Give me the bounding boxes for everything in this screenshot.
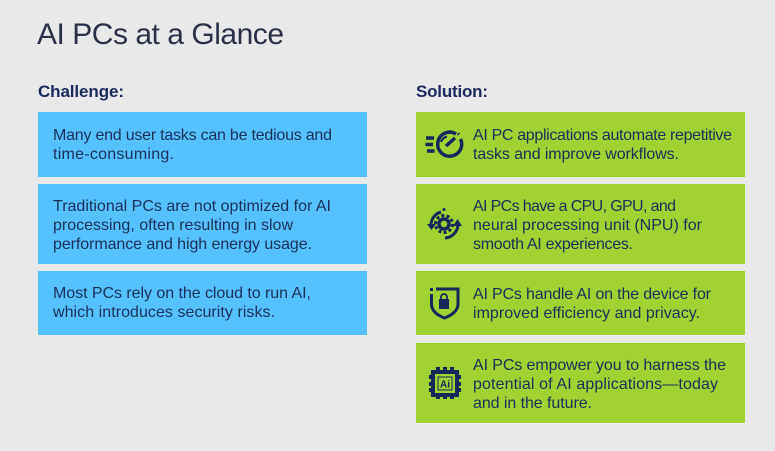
panel: challenge 3: which introduces security risks.	[52, 304, 275, 321]
panel: challenge 1	[38, 112, 367, 177]
panel: solution 2: smooth AI experiences.	[473, 236, 633, 253]
icon: shield with lock	[430, 288, 458, 318]
icon: gear with cycle arrows	[427, 208, 462, 238]
panel: solution 1: tasks and improve workflows.	[473, 146, 679, 163]
heading: challenge: Challenge:	[38, 82, 124, 101]
icon: AI chip: Ai	[440, 380, 450, 390]
panel: challenge 1: Many end user tasks can be tedious and	[53, 127, 332, 144]
panel: solution 2	[416, 184, 745, 264]
panel: solution 4: and in the future.	[473, 395, 592, 412]
title: AI PCs at a Glance	[37, 18, 284, 51]
heading: solution: Solution:	[416, 82, 488, 101]
panel: challenge 2	[38, 184, 367, 264]
panel: challenge 2: Traditional PCs are not optimized for AI	[53, 198, 331, 215]
icon: AI chip	[429, 367, 461, 399]
panel: solution 1: AI PC applications automate repetitive	[473, 127, 732, 144]
panel: solution 3	[416, 271, 745, 335]
panel: solution 4	[416, 343, 745, 423]
panel: challenge 2: performance and high energy usage.	[53, 236, 312, 253]
panel: challenge 2: processing, often resulting in slow	[53, 217, 293, 234]
panel: solution 4: AI PCs empower you to harness the	[473, 357, 726, 374]
panel: solution 2: neural processing unit (NPU) for	[473, 217, 703, 234]
icon: speedometer	[426, 132, 462, 156]
panel: solution 2: AI PCs have a CPU, GPU, and	[473, 198, 676, 215]
panel: challenge 3	[38, 271, 367, 335]
panel: solution 3: improved efficiency and privacy.	[473, 305, 700, 322]
panel: solution 3: AI PCs handle AI on the device for	[473, 286, 712, 303]
panel: solution 4: potential of AI applications—today	[473, 376, 718, 393]
panel: challenge 3: Most PCs rely on the cloud to run AI,	[53, 285, 311, 302]
panel: challenge 1: time-consuming.	[53, 146, 174, 163]
panel: solution 1	[416, 112, 745, 177]
